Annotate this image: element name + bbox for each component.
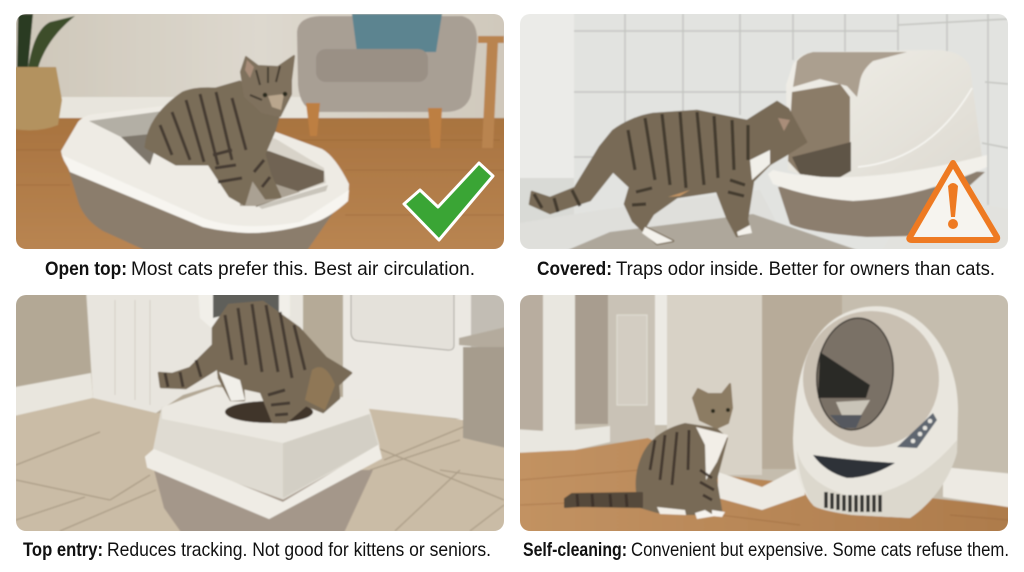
- caption: open top: Most cats prefer this. Best air circulation.: [131, 258, 475, 280]
- cat: tabby in box: [146, 56, 294, 204]
- side table: [478, 36, 504, 148]
- self-cleaning robot litter box: [793, 306, 958, 518]
- panel: top entry litter box: [10, 289, 510, 540]
- door and trim: [514, 289, 667, 458]
- cat: tabby sniffing covered box: [530, 102, 806, 244]
- icon: potted plant: [14, 14, 75, 130]
- caption: top entry: Reduces tracking. Not good for kittens or seniors.: [107, 539, 491, 561]
- washing machine: [86, 289, 303, 413]
- caption: self-cleaning: Self-cleaning:: [523, 539, 627, 561]
- caption: top entry: Top entry:: [23, 539, 103, 561]
- panel: self-cleaning litter box: [514, 289, 1014, 536]
- caption: open top: Open top:: [45, 258, 127, 280]
- litter box: open top: [61, 106, 349, 252]
- litter box: covered hood: [768, 50, 987, 237]
- caption: covered: Traps odor inside. Better for owners than cats.: [616, 258, 995, 280]
- cat: tabby climbing into box: [159, 302, 351, 422]
- cat: tabby sitting: [565, 384, 732, 519]
- trash bin: [458, 328, 504, 448]
- panel: covered litter box: [514, 8, 1014, 254]
- dryer: [343, 289, 471, 420]
- litter box: top entry: [146, 388, 381, 535]
- armchair: [297, 14, 477, 148]
- panel: open top litter box: [10, 8, 510, 258]
- icon: warning triangle: [909, 163, 997, 240]
- caption: covered: Covered:: [537, 258, 612, 280]
- icon: green check mark: [404, 163, 493, 240]
